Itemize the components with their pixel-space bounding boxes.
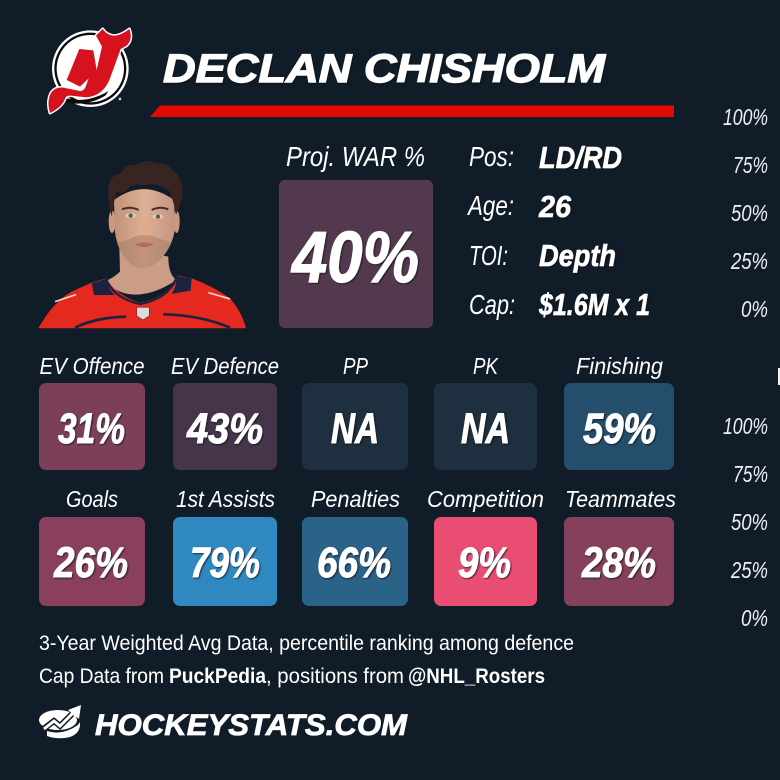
- player details: Cap:: [469, 289, 515, 320]
- brand: HOCKEYSTATS.COM: HOCKEYSTATS.COM: [95, 709, 408, 742]
- tile: Teammates: Teammates: [565, 486, 676, 512]
- label: Proj. WAR %: Proj. WAR %: [286, 141, 425, 172]
- tile: Competition: [427, 486, 544, 606]
- axis labels: upper: [723, 104, 768, 322]
- tile: PK: PK: [473, 353, 499, 379]
- tile: PK: [434, 353, 537, 470]
- footnote: sources: Cap Data from: [39, 665, 164, 688]
- player details: [466, 140, 650, 322]
- edge mark: [778, 368, 780, 385]
- footnote: sources: , positions from: [266, 665, 404, 688]
- axis labels: upper: 75%: [733, 152, 768, 178]
- tile: Finishing: Finishing: [576, 353, 663, 379]
- tile: 1st Assists: 1st Assists: [176, 486, 275, 512]
- tile: Goals: 26%: [53, 539, 128, 587]
- axis labels: upper: 25%: [730, 248, 768, 274]
- tile: EV Offence: EV Offence: [40, 353, 144, 379]
- tile: PP: NA: [331, 405, 379, 453]
- player details: Age:: [466, 190, 514, 221]
- tile: Proj. WAR: 40%: [290, 218, 419, 298]
- tile: PP: [302, 353, 408, 470]
- tile: Penalties: [302, 486, 408, 606]
- eyes: [125, 213, 136, 218]
- tile: 1st Assists: 79%: [190, 539, 260, 587]
- tile: Teammates: [564, 486, 676, 606]
- tile: Goals: Goals: [66, 486, 118, 512]
- tile: Competition: 9%: [458, 539, 511, 587]
- tile: PK: NA: [461, 405, 510, 453]
- eyebrows: [122, 208, 168, 210]
- hair: [108, 161, 183, 217]
- tile: EV Defence: [171, 353, 279, 470]
- player details: $1.6M x 1: [538, 287, 650, 322]
- neck: [104, 247, 177, 295]
- mouth: [134, 242, 154, 247]
- ears: [109, 210, 115, 233]
- axis labels: upper: 0%: [741, 296, 768, 322]
- tile: 1st Assists: [173, 486, 277, 606]
- tile: Goals: [39, 486, 145, 606]
- tile: EV Offence: 31%: [58, 405, 125, 453]
- axis labels: lower: 75%: [733, 461, 768, 487]
- jersey: [38, 275, 246, 328]
- axis labels: lower: 50%: [731, 509, 768, 535]
- beard: [117, 235, 171, 268]
- axis labels: lower: [723, 413, 768, 631]
- icon: hockeystats logo: [39, 705, 81, 738]
- tile: Teammates: 28%: [581, 539, 656, 587]
- tile: Penalties: Penalties: [311, 486, 400, 512]
- tile: Finishing: [564, 353, 674, 470]
- player details: LD/RD: [539, 140, 622, 175]
- red title bar: [150, 106, 674, 117]
- axis labels: upper: 50%: [731, 200, 768, 226]
- collar: [92, 276, 192, 295]
- nose: [138, 217, 152, 235]
- tile: EV Defence: 43%: [186, 405, 263, 453]
- title: DECLAN CHISHOLM: [163, 47, 607, 91]
- nhl shield: [137, 307, 149, 320]
- footnote: sources: @NHL_Rosters: [408, 665, 545, 688]
- player portrait: [38, 161, 246, 328]
- player details: 26: [538, 189, 572, 224]
- player details: Depth: [539, 238, 616, 273]
- tile: EV Offence: [39, 353, 145, 470]
- tile: Competition: Competition: [427, 486, 544, 512]
- tile: PP: PP: [343, 353, 369, 379]
- tile: EV Defence: EV Defence: [171, 353, 279, 379]
- footnote: sources: [39, 665, 545, 688]
- tile: Proj. WAR: [279, 180, 433, 328]
- player details: TOI:: [469, 240, 508, 271]
- player details: Pos:: [469, 141, 514, 172]
- icon: New Jersey Devils logo: [48, 29, 131, 113]
- tile: Finishing: 59%: [583, 405, 656, 453]
- axis labels: lower: 0%: [741, 605, 768, 631]
- jersey stripes: [75, 314, 230, 328]
- tile: Penalties: 66%: [317, 539, 391, 587]
- footnote: data description: 3-Year Weighted Avg Data, percentile ranking among defence: [39, 632, 574, 655]
- axis labels: lower: 25%: [730, 557, 768, 583]
- footnote: sources: PuckPedia: [169, 665, 266, 688]
- face: [114, 189, 175, 268]
